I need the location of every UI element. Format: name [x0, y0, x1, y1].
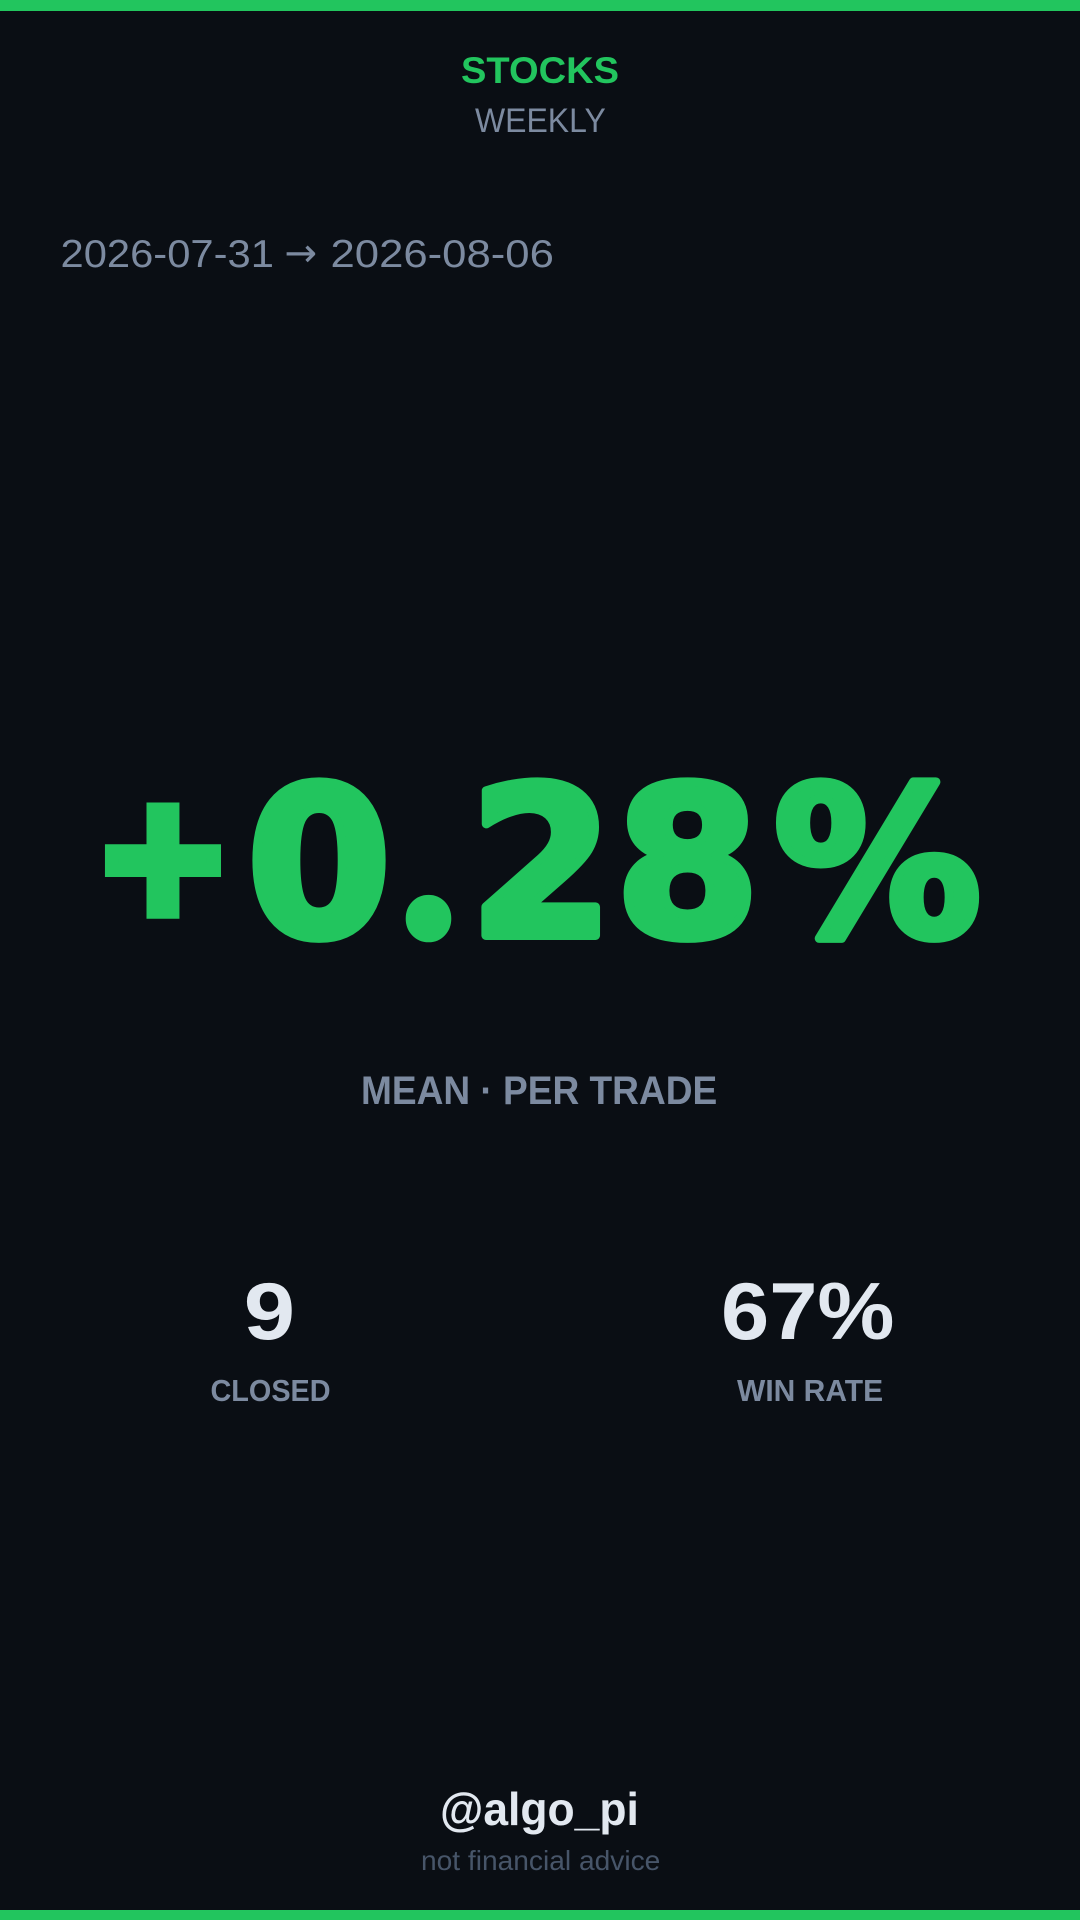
handle: @algo_pi: [440, 1783, 639, 1835]
subtitle: weekly: WEEKLY: [475, 101, 606, 139]
disclaimer: not financial advice: [421, 1845, 660, 1876]
stat: win rate: [721, 1266, 894, 1408]
win rate label: WIN RATE: [737, 1374, 883, 1408]
date range: [60, 231, 554, 276]
hero metric: mean return: +: [95, 762, 231, 951]
header: [461, 50, 619, 139]
win rate value: 67%: [721, 1266, 894, 1356]
title: stocks: STOCKS: [461, 50, 619, 91]
start date: 2026-07-31: [60, 231, 274, 276]
stat: closed trades: [210, 1266, 331, 1408]
footer: [421, 1783, 660, 1876]
bottom accent bar: [0, 1910, 1080, 1920]
hero metric: mean return: .: [396, 703, 461, 993]
closed value: 9: [244, 1266, 295, 1357]
arrow: →: [284, 231, 317, 276]
top accent bar: [0, 0, 1080, 11]
stats row: [210, 1266, 894, 1408]
hero metric: mean return: 0: [247, 744, 391, 984]
closed label: CLOSED: [210, 1374, 331, 1408]
end date: 2026-08-06: [330, 232, 554, 275]
hero metric label: MEAN · PER TRADE: [361, 1069, 717, 1113]
hero metric: mean return: 28%: [470, 744, 981, 984]
